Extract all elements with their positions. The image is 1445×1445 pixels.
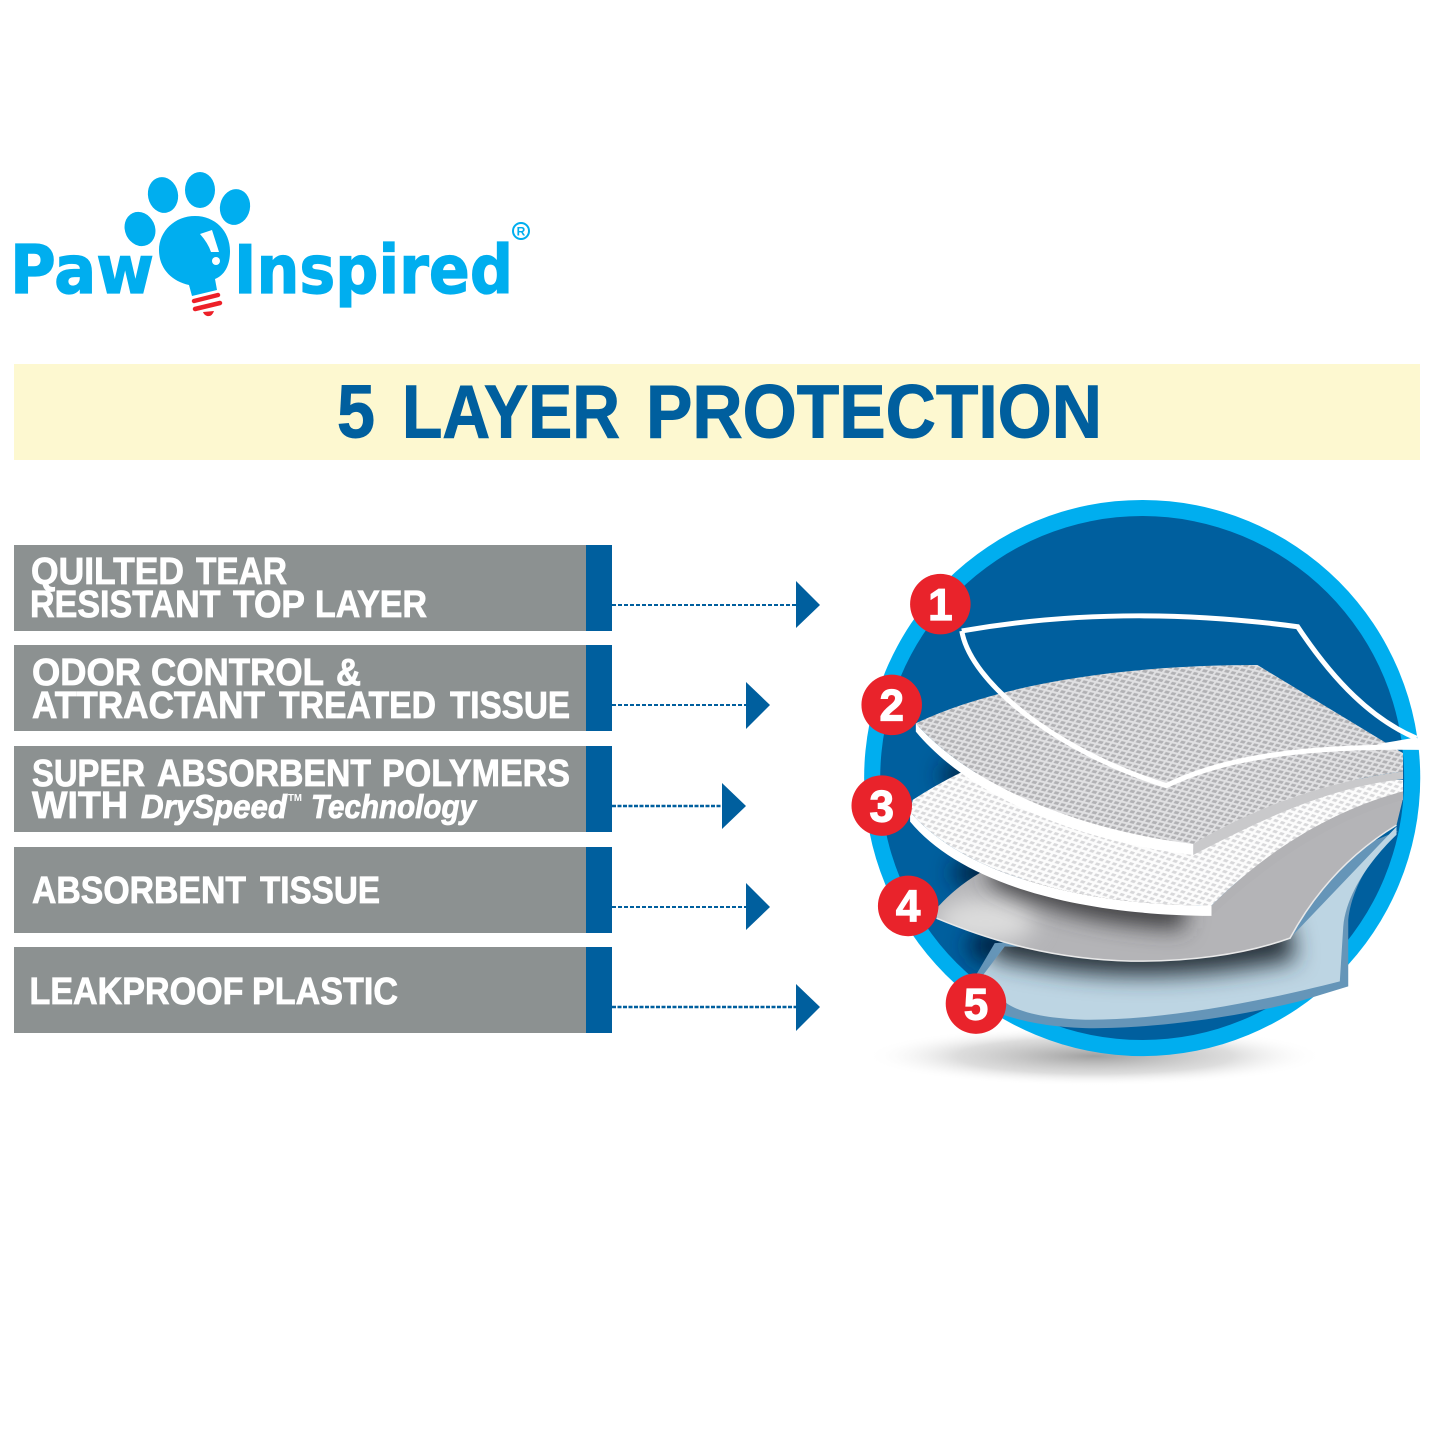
label text: LEAKPROOF [30,971,244,1013]
layer 3: odor tissue sheet [910,773,1403,916]
label text: CONTROL [151,652,324,694]
badge 2 [861,675,922,735]
badge 4: 4 [896,883,921,932]
layer 4: absorbent tissue [936,788,1403,961]
layer 5: leakproof plastic [977,827,1398,1028]
label text [32,753,570,827]
badge 5: 5 [964,980,988,1029]
label text: RESISTANT [30,584,220,626]
title: LAYER [402,370,620,454]
panel: layer label 2 [14,645,612,731]
outer blue ring [864,500,1420,1056]
floor shadow [865,1026,1324,1086]
title: 5 [337,370,375,454]
icon: light bulb [159,216,230,316]
label text [30,551,427,626]
icon: paw toes [119,172,253,251]
title: PROTECTION [646,370,1102,454]
title [337,370,1102,454]
diagram: layered pad cross-section [851,500,1421,1086]
label text: SUPER [32,753,145,795]
panel: layer label 3 [14,746,612,832]
badge 1 [910,574,971,634]
label text: PLASTIC [252,971,398,1013]
title banner [14,364,1420,460]
arrow: layer 5 [612,984,820,1031]
layer 1: clear top sheet outline [962,616,1421,786]
label text: & [336,652,361,694]
label text: ODOR [32,652,141,694]
badge 5 [946,973,1006,1034]
label text: TREATED [279,685,436,727]
label text: POLYMERS [382,753,570,795]
label text: ABSORBENT [157,753,371,795]
panel: layer label 5 [14,947,612,1033]
inner dark circle [880,516,1404,1040]
logo wordmark: Inspired: Inspired [234,231,513,309]
label text: TEAR [196,551,287,593]
arrow: layer 1 [612,581,820,628]
label text: TM [288,793,302,804]
shadows on circle [941,759,1026,963]
logo: Paw Inspired [10,172,529,316]
arrow: layer 3 [612,783,746,829]
label text: TISSUE [450,685,570,727]
label text: TISSUE [260,870,380,912]
registered mark [513,223,529,239]
arrow: layer 4 [612,883,770,930]
badge 4 [878,876,938,936]
badge 1: 1 [928,581,953,630]
arrow: layer 2 [612,682,770,729]
label text: TOP [233,584,305,626]
panel: layer label 4 [14,847,612,933]
badge 2: 2 [879,682,904,731]
layer 2: quilted sheet [916,665,1403,855]
label text [32,652,570,727]
label text: LAYER [315,584,427,626]
registered mark: R [517,224,526,238]
label text [30,971,398,1013]
label text: ABSORBENT [32,870,246,912]
panel: layer label 1 [14,545,612,631]
label text: Technology [311,788,477,825]
badge 3 [851,775,912,836]
label text: DrySpeed [141,788,288,825]
badge 3: 3 [869,782,894,831]
label text: ATTRACTANT [32,685,265,727]
logo wordmark: Paw: Paw [10,231,154,309]
label text [32,870,380,912]
label text: WITH [32,785,128,827]
label text: QUILTED [31,551,184,593]
